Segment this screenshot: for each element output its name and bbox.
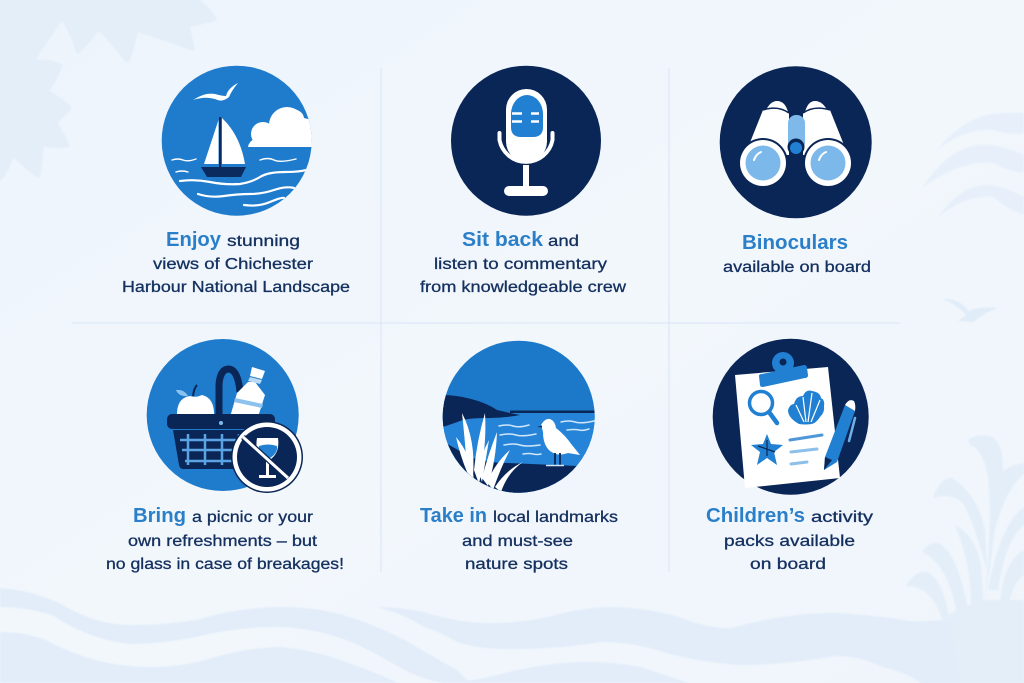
icon: picnic basket with no glass badge xyxy=(147,339,303,493)
background: seagull right xyxy=(942,299,998,322)
text: children's: activity xyxy=(811,509,873,526)
icon: sailing boat xyxy=(162,66,312,216)
text: take in: nature spots xyxy=(465,556,568,573)
text: bring: no glass in case of breakages! xyxy=(106,556,344,573)
text: take in xyxy=(420,505,618,573)
text: enjoy: views of Chichester xyxy=(153,256,314,273)
panel: landmarks xyxy=(420,341,618,573)
background: waves right xyxy=(922,112,1024,218)
text: binoculars: Binoculars xyxy=(742,232,848,254)
panel: commentary xyxy=(420,66,627,296)
grid dividers xyxy=(72,68,900,572)
text: sit back: and xyxy=(548,233,579,250)
panel: picnic xyxy=(106,339,344,573)
text: children's: Children’s xyxy=(706,505,805,527)
text: bring: Bring xyxy=(133,505,186,527)
background: palm splash top left xyxy=(0,0,214,178)
text: binoculars: available on board xyxy=(723,259,871,276)
icon: microphone xyxy=(451,66,601,216)
text: take in: Take in xyxy=(420,505,487,527)
text: enjoy: Enjoy xyxy=(166,229,222,251)
text: enjoy: stunning xyxy=(227,233,300,250)
text: sit back: Sit back xyxy=(462,229,544,251)
icon: coastal shoreline with bird xyxy=(440,341,600,502)
text: sit back: from knowledgeable crew xyxy=(420,279,627,296)
background: waves bottom xyxy=(0,588,960,683)
text: children's: on board xyxy=(750,556,826,573)
icon: binoculars xyxy=(720,66,872,218)
text: take in: local landmarks xyxy=(493,509,618,526)
icon: activity clipboard xyxy=(713,339,869,495)
text: take in: and must-see xyxy=(462,533,573,550)
panel: enjoy views xyxy=(122,66,350,296)
text: children's: packs available xyxy=(724,533,855,550)
panel: activity packs xyxy=(706,339,873,573)
text: enjoy xyxy=(122,229,350,296)
text: bring: own refreshments – but xyxy=(128,533,318,550)
panel: binoculars xyxy=(720,66,872,276)
text: children's xyxy=(706,505,873,573)
text: binoculars xyxy=(723,232,871,276)
text: bring: a picnic or your xyxy=(192,509,314,526)
text: sit back xyxy=(420,229,627,296)
background: reeds bottom right xyxy=(880,436,1024,683)
text: enjoy: Harbour National Landscape xyxy=(122,279,350,296)
text: bring xyxy=(106,505,344,573)
text: sit back: listen to commentary xyxy=(434,256,607,273)
